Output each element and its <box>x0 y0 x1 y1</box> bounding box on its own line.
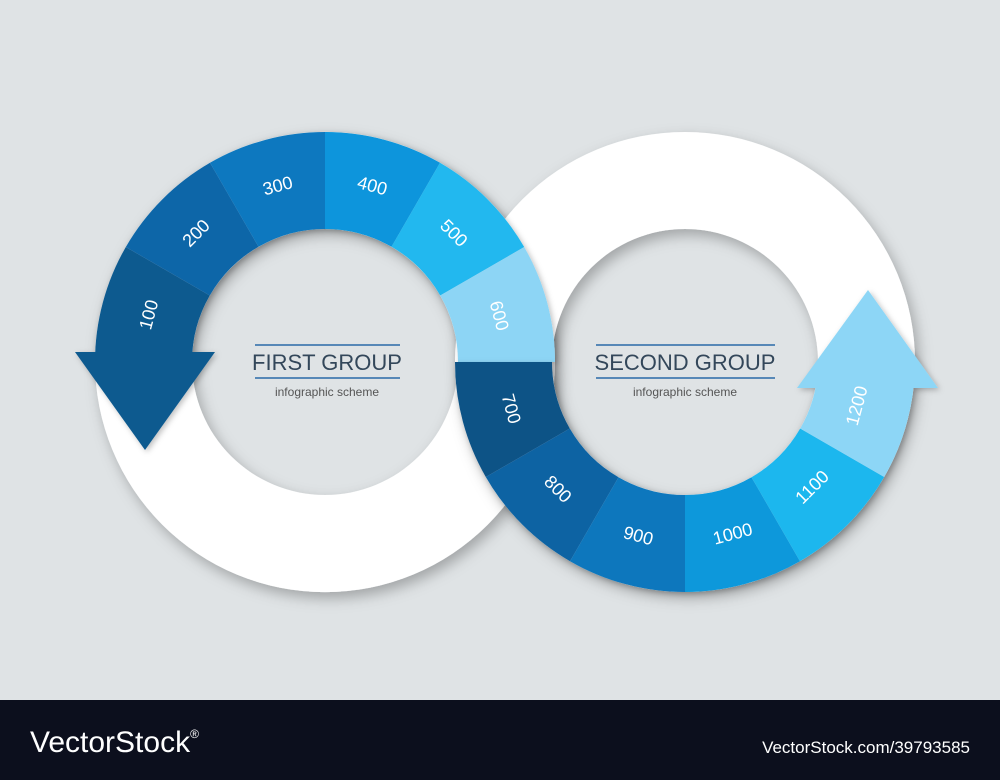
segment labels: 500 <box>436 215 472 251</box>
arrow head right <box>797 290 938 388</box>
segment 600 <box>440 247 555 362</box>
segment labels: 1100 <box>791 466 833 508</box>
footer bar: VectorStock <box>30 726 190 759</box>
first group title <box>252 345 402 399</box>
segment labels: 200 <box>178 215 214 251</box>
segment labels: 400 <box>355 172 389 199</box>
left segments <box>75 132 555 450</box>
segment 100 <box>95 247 210 362</box>
segment 200 <box>126 163 258 296</box>
segment 300 <box>210 132 325 247</box>
segment 1200 <box>800 362 915 477</box>
segment labels: 100 <box>135 298 162 332</box>
first group title: FIRST GROUP <box>252 350 402 375</box>
right white ring <box>455 132 915 592</box>
second group title <box>595 345 775 399</box>
arrow head left <box>75 352 215 450</box>
footer bar <box>0 700 1000 780</box>
segment 1100 <box>752 428 884 561</box>
segment labels: 800 <box>540 471 576 507</box>
segment 700 <box>455 362 570 477</box>
segment 400 <box>325 132 440 247</box>
segment labels: 1000 <box>711 519 755 549</box>
segment labels: 700 <box>498 392 525 426</box>
segment 1000 <box>685 477 800 592</box>
segment labels: 900 <box>621 522 655 549</box>
segment labels: 600 <box>486 299 513 333</box>
left white ring <box>95 132 555 592</box>
footer bar: ® <box>190 727 199 741</box>
second group title: SECOND GROUP <box>595 350 775 375</box>
segment labels <box>135 172 872 549</box>
right segments <box>455 290 938 592</box>
segment labels: 1200 <box>842 384 872 428</box>
segment 900 <box>570 477 685 592</box>
second group title: infographic scheme <box>633 385 737 399</box>
segment 800 <box>486 428 618 561</box>
first group title: infographic scheme <box>275 385 379 399</box>
segment 500 <box>392 163 524 296</box>
segment labels: 300 <box>261 172 295 199</box>
footer bar: VectorStock.com/39793585 <box>762 738 970 757</box>
